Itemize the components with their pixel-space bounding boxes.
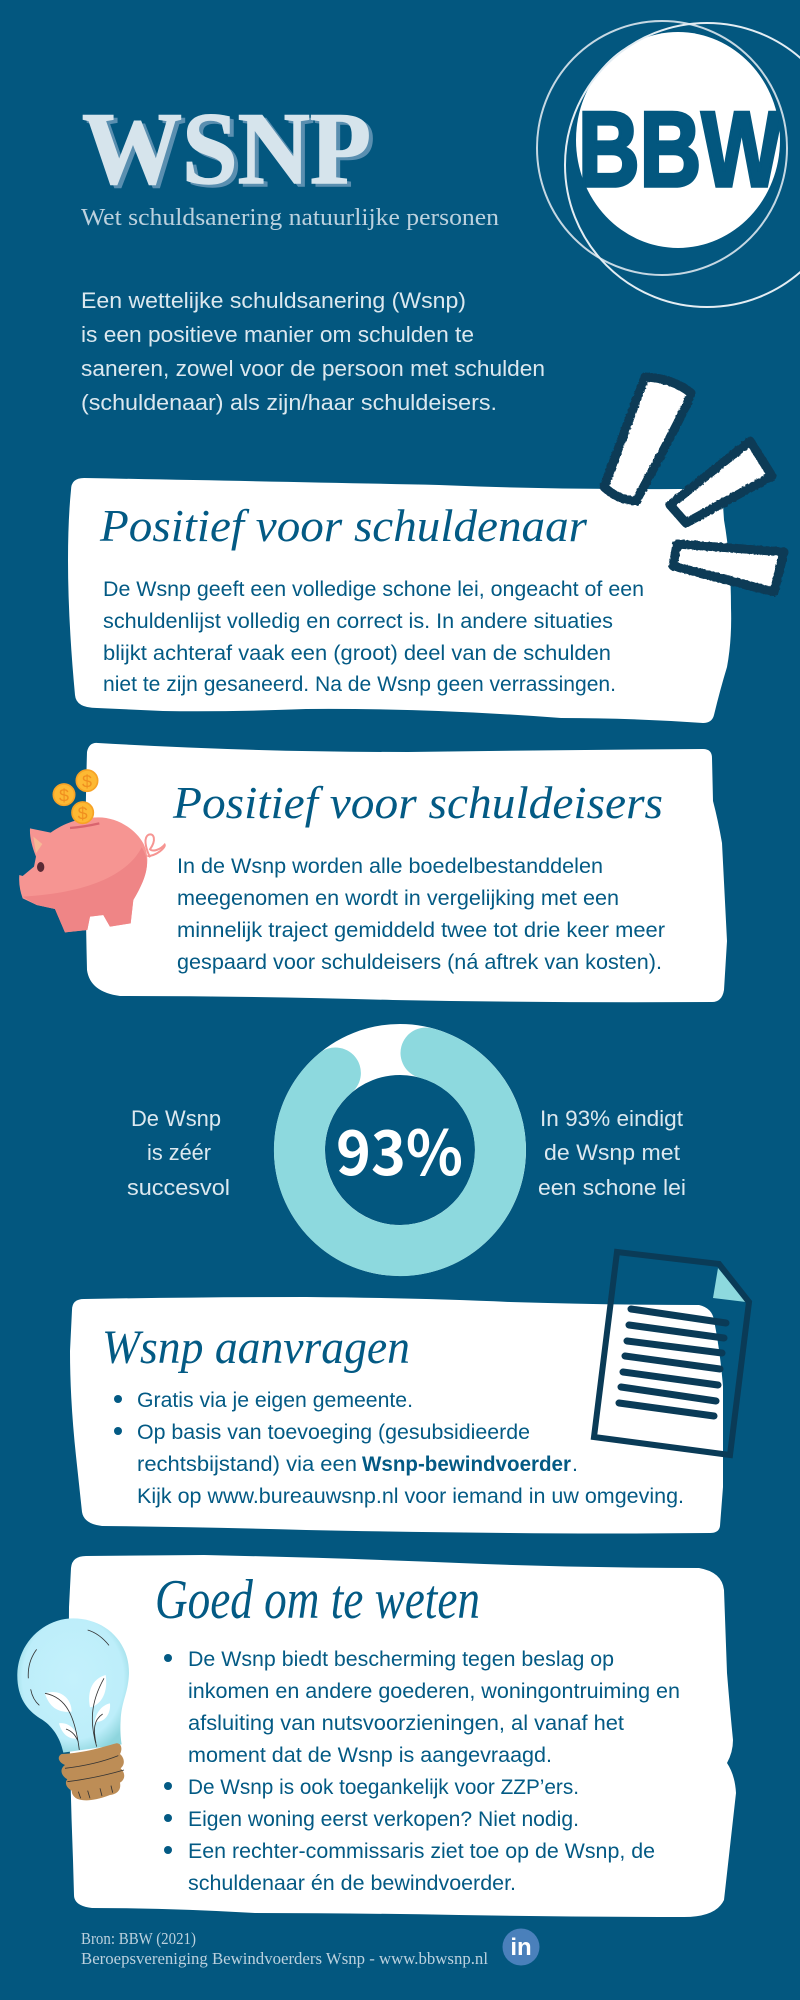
bullet list: . xyxy=(572,1452,578,1476)
heading: Wsnp aanvragen xyxy=(102,1321,410,1374)
icon: document xyxy=(594,1252,749,1455)
panel: positief voor schuldenaar xyxy=(68,478,731,723)
text: right of donut: de Wsnp met xyxy=(544,1140,681,1165)
bullet list: inkomen en andere goederen, woningontruiming en xyxy=(188,1679,680,1703)
logo: BBW xyxy=(537,21,800,307)
text block: gespaard voor schuldeisers (ná aftrek van kosten). xyxy=(177,950,662,974)
bullet list: Eigen woning eerst verkopen? Niet nodig. xyxy=(188,1807,579,1831)
text: left of donut: is zéér xyxy=(147,1140,211,1165)
title: WSNP xyxy=(82,92,371,206)
intro text: (schuldenaar) als zijn/haar schuldeisers. xyxy=(81,390,497,415)
donut chart: 93% xyxy=(299,1050,500,1251)
intro text: saneren, zowel voor de persoon met schulden xyxy=(81,356,545,381)
bullet list xyxy=(164,1647,680,1895)
icon: piggy bank xyxy=(19,770,165,932)
icon: linkedin xyxy=(502,1928,540,1966)
intro text: is een positieve manier om schulden te xyxy=(81,322,474,347)
bullet list: Gratis via je eigen gemeente. xyxy=(137,1388,413,1412)
text block: schuldenlijst volledig en correct is. In andere situaties xyxy=(103,609,613,633)
icon: piggy bank: $ xyxy=(59,785,69,805)
footer source: Beroepsvereniging Bewindvoerders Wsnp - www.bbwsnp.nl xyxy=(81,1949,488,1968)
title: WSNP xyxy=(86,95,375,209)
intro text: Een wettelijke schuldsanering (Wsnp) xyxy=(81,288,466,313)
footer source: Bron: BBW (2021) xyxy=(81,1929,196,1948)
bullet list: moment dat de Wsnp is aangevraagd. xyxy=(188,1743,552,1767)
bullet list: De Wsnp biedt bescherming tegen beslag op xyxy=(188,1647,614,1671)
text: right of donut: In 93% eindigt xyxy=(540,1106,684,1131)
text: right of donut xyxy=(538,1106,686,1200)
text block: meegenomen en wordt in vergelijking met een xyxy=(177,886,619,910)
icon: exclamation strokes xyxy=(604,377,784,592)
bullet list: schuldenaar én de bewindvoerder. xyxy=(188,1871,516,1895)
text: right of donut: een schone lei xyxy=(538,1175,686,1200)
icon: light bulb xyxy=(17,1618,129,1800)
text block: De Wsnp geeft een volledige schone lei, ongeacht of een xyxy=(103,577,644,601)
panel: wsnp aanvragen xyxy=(70,1297,723,1534)
bullet list: Wsnp-bewindvoerder xyxy=(362,1452,572,1476)
icon: piggy bank: $ xyxy=(82,771,92,791)
text block xyxy=(177,854,665,974)
text: left of donut xyxy=(127,1106,230,1200)
bullet list: Kijk op www.bureauwsnp.nl voor iemand in uw omgeving. xyxy=(137,1484,684,1508)
heading: Goed om te weten xyxy=(155,1569,480,1631)
text: left of donut: succesvol xyxy=(127,1175,230,1200)
heading: Positief voor schuldenaar xyxy=(99,500,588,551)
bullet list xyxy=(114,1388,684,1508)
icon: piggy bank: $ xyxy=(78,803,88,823)
text block: blijkt achteraf vaak een (groot) deel van de schulden xyxy=(103,641,611,665)
footer source xyxy=(81,1929,488,1968)
panel: goed om te weten xyxy=(69,1555,736,1917)
text: left of donut: De Wsnp xyxy=(131,1106,221,1131)
panel: positief voor schuldeisers xyxy=(86,743,727,1002)
bullet list: De Wsnp is ook toegankelijk voor ZZP’ers. xyxy=(188,1775,579,1799)
text block: minnelijk traject gemiddeld twee tot drie keer meer xyxy=(177,918,665,942)
bullet list: rechtsbijstand) via een xyxy=(137,1452,357,1476)
text block: niet te zijn gesaneerd. Na de Wsnp geen verrassingen. xyxy=(103,672,616,696)
text block xyxy=(103,577,644,696)
subtitle: Wet schuldsanering natuurlijke personen xyxy=(81,205,499,231)
bullet list: afsluiting van nutsvoorzieningen, al vanaf het xyxy=(188,1711,624,1735)
bullet list: Een rechter-commissaris ziet toe op de Wsnp, de xyxy=(188,1839,655,1863)
intro text xyxy=(81,288,545,415)
heading: Positief voor schuldeisers xyxy=(172,777,663,828)
text block: In de Wsnp worden alle boedelbestanddelen xyxy=(177,854,603,878)
percentage: 93% xyxy=(336,1103,463,1193)
icon: linkedin: in xyxy=(510,1934,532,1961)
bullet list: Op basis van toevoeging (gesubsidieerde xyxy=(137,1420,530,1444)
